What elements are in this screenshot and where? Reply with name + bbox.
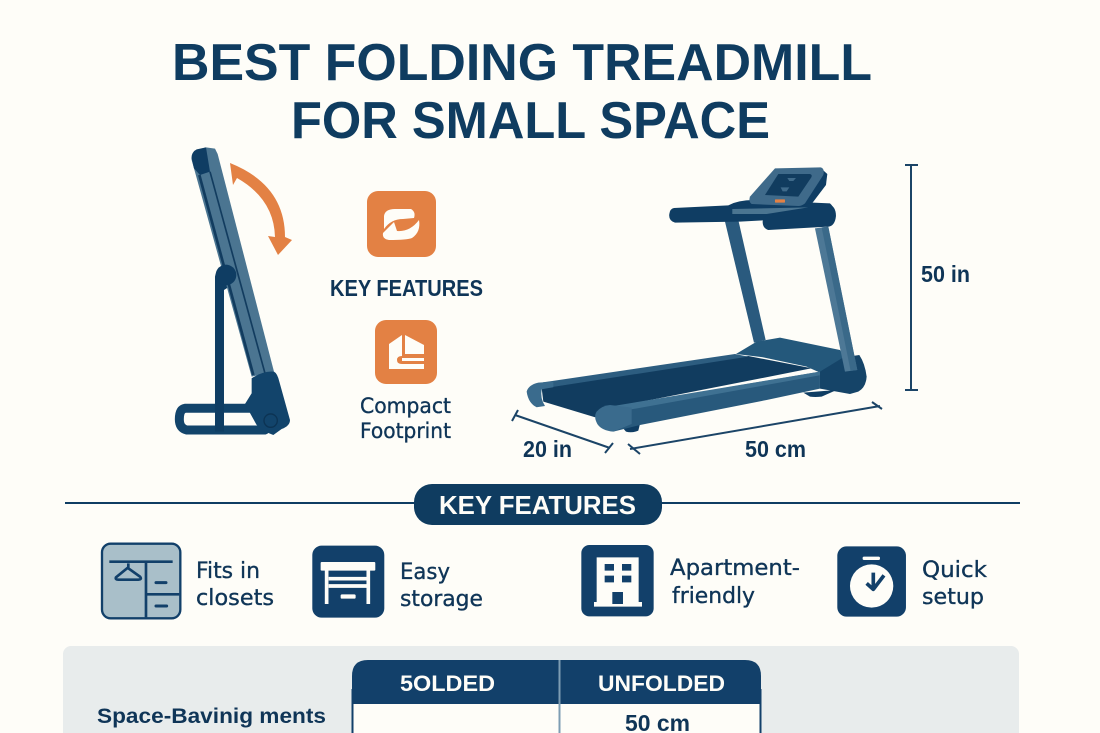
feature: apartment-friendly: friendly [672, 584, 755, 609]
feature: fits in closets: Fits in [196, 559, 260, 584]
panel: space-saving comparison [63, 646, 1019, 733]
feature: easy storage [312, 546, 483, 618]
label: compact footprint [360, 394, 451, 443]
hinge joint [216, 265, 236, 285]
header: unfolded: UNFOLDED [598, 671, 725, 696]
deck [191, 147, 274, 377]
height dimension [905, 165, 918, 390]
far rail [542, 354, 748, 389]
handlebar rear [669, 200, 834, 223]
base frame [179, 408, 265, 430]
rear roller housing [245, 372, 290, 435]
label: compact footprint: Footprint [360, 419, 451, 443]
key features pill: KEY FEATURES [439, 490, 636, 520]
title: FOR SMALL SPACE [291, 92, 770, 150]
column divider [558, 660, 560, 733]
feature: quick setup: Quick [922, 558, 987, 583]
icon: apartment building [581, 545, 654, 616]
roller wheel [264, 414, 277, 427]
near rail [613, 372, 820, 432]
icon: stopwatch [837, 546, 906, 617]
folded treadmill illustration [179, 147, 290, 435]
far end cap [527, 382, 553, 407]
motor cover [736, 338, 847, 373]
table body [352, 690, 760, 733]
feature: quick setup [837, 546, 987, 617]
console strip [732, 207, 808, 214]
icon: storage shutter [312, 546, 384, 618]
label: 20 in: 20 in [523, 436, 572, 462]
feature: fits in closets: closets [196, 586, 274, 611]
row label: Space-Bavinig ments [97, 705, 326, 728]
console readouts [781, 178, 796, 191]
belt [542, 356, 812, 417]
label: 50 in: 50 in [921, 261, 970, 287]
icon: closet [102, 544, 180, 618]
heading: key features small: KEY FEATURES [330, 275, 483, 301]
left upright [725, 220, 766, 343]
motor end [820, 355, 867, 394]
feature: fits in closets [102, 544, 274, 618]
icon: orange folding badge [367, 191, 436, 257]
title [172, 34, 872, 150]
console face [749, 167, 824, 206]
length dimension [628, 402, 882, 454]
console orange button [775, 199, 785, 203]
handlebar front [763, 204, 836, 230]
key features pill [414, 484, 662, 525]
width dimension [512, 410, 613, 453]
rail highlight [613, 372, 820, 409]
label: compact footprint: Compact [360, 394, 451, 418]
near end cap [595, 405, 632, 432]
table header [352, 660, 761, 704]
rear foot [803, 390, 837, 397]
icon: orange compact badge [375, 320, 437, 384]
console side [802, 167, 827, 206]
unfolded treadmill illustration [527, 167, 867, 432]
title: BEST FOLDING TREADMILL [172, 34, 872, 92]
section divider [65, 502, 1020, 504]
feature: easy storage: storage [400, 587, 483, 612]
folding arrow [230, 163, 292, 255]
deck groove [210, 172, 265, 373]
feature: apartment-friendly [581, 545, 800, 616]
front foot [622, 424, 640, 432]
label: 50 cm: 50 cm [745, 436, 806, 462]
upright post [215, 265, 237, 432]
header: folded: 5OLDED [400, 671, 495, 696]
console screen [765, 174, 812, 197]
right upright [815, 227, 857, 372]
top cap [192, 147, 210, 175]
feature: easy storage: Easy [400, 560, 450, 585]
deck left border [199, 175, 253, 375]
feature: apartment-friendly: Apartment- [670, 556, 800, 581]
feature: quick setup: setup [922, 585, 984, 610]
